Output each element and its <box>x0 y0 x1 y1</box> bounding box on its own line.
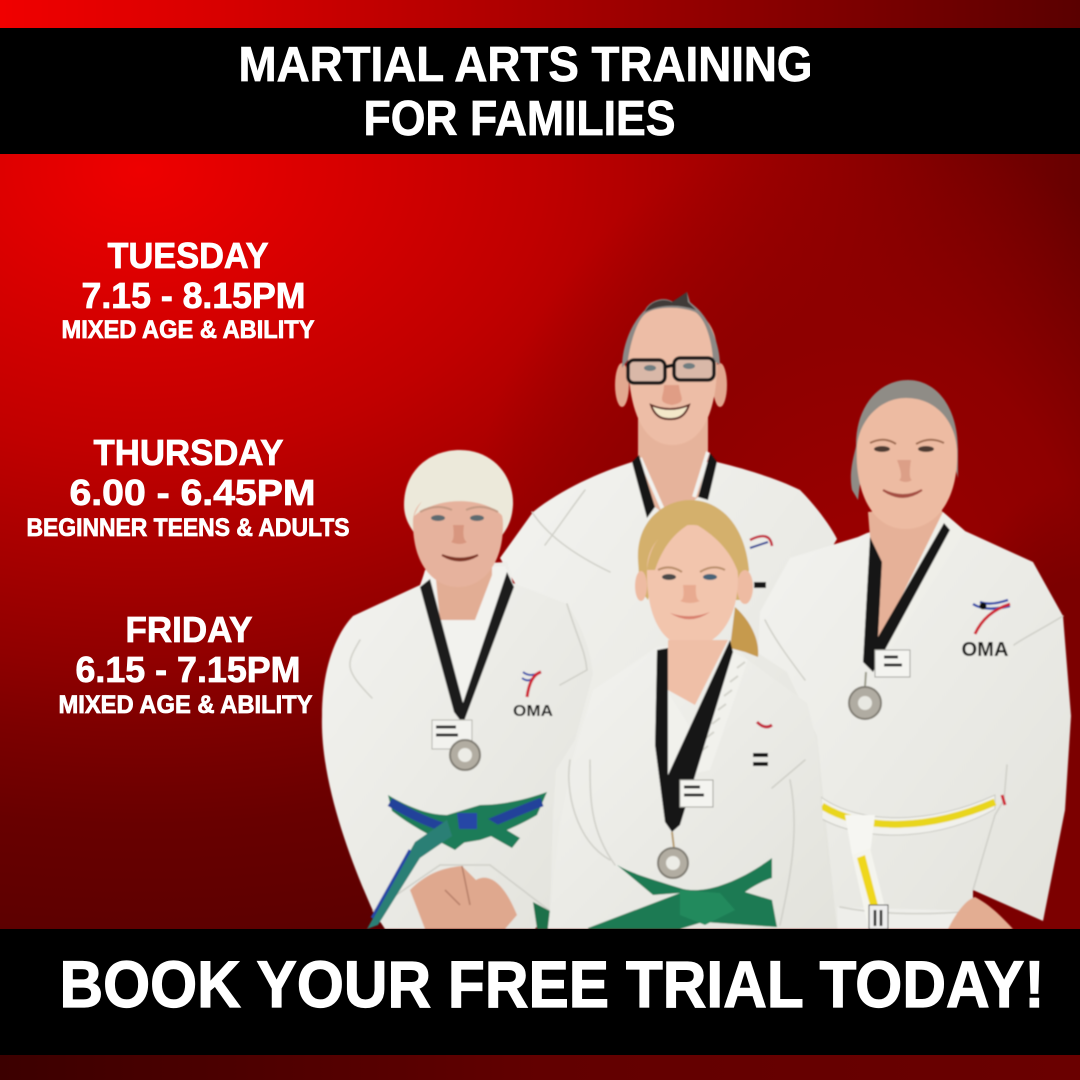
person: older woman at left: OMA <box>513 703 553 720</box>
photo: family group in white uniforms <box>322 292 1071 929</box>
title banner: MARTIAL ARTS TRAINING <box>238 38 812 92</box>
person: woman at right <box>758 380 1071 929</box>
schedule: Thursday: BEGINNER TEENS & ADULTS <box>26 514 350 542</box>
person: girl in front <box>548 500 837 929</box>
person: man at back <box>500 292 845 929</box>
schedule: Tuesday: MIXED AGE & ABILITY <box>62 316 315 344</box>
schedule: Tuesday: 7.15 - 8.15PM <box>82 275 306 316</box>
schedule: Friday: MIXED AGE & ABILITY <box>58 691 313 719</box>
schedule: Friday <box>58 609 313 719</box>
schedule: Thursday <box>26 432 350 542</box>
title banner <box>0 28 1080 154</box>
title banner: FOR FAMILIES <box>364 92 676 146</box>
person: woman at right: OMA <box>962 639 1008 661</box>
schedule: Friday: FRIDAY <box>126 609 252 650</box>
person: older woman at left <box>322 450 593 929</box>
schedule: Tuesday <box>62 235 315 344</box>
call to action banner <box>0 929 1080 1055</box>
schedule: Friday: 6.15 - 7.15PM <box>76 649 300 690</box>
schedule: Thursday: 6.00 - 6.45PM <box>70 472 316 513</box>
schedule: Thursday: THURSDAY <box>94 432 284 473</box>
schedule: Tuesday: TUESDAY <box>108 235 268 276</box>
